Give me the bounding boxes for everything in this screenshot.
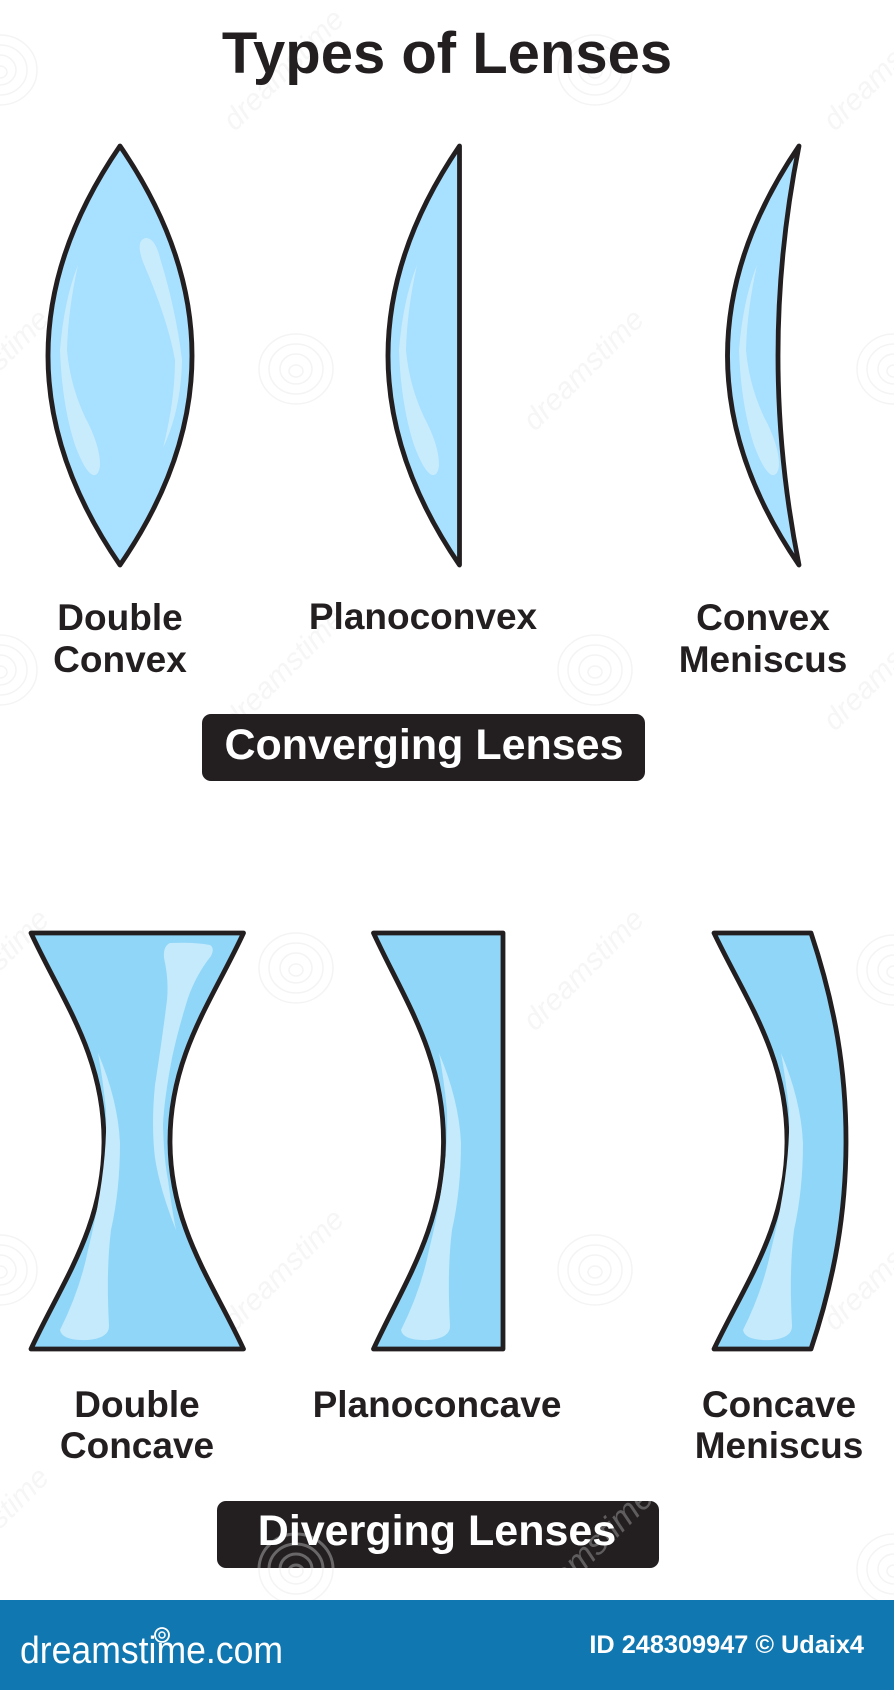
- badge: diverging lenses: dreamstime: [509, 1478, 661, 1631]
- badge: converging lenses: Converging Lenses: [224, 721, 624, 769]
- badge: diverging lenses: [217, 1501, 659, 1568]
- label: double concave: Double: [74, 1384, 200, 1425]
- lens: convex meniscus: [728, 146, 799, 565]
- title: Types of Lenses: [222, 21, 672, 86]
- watermark pattern: dreamstime: [217, 3, 351, 137]
- lens: double convex: [48, 146, 192, 565]
- label: double concave: Concave: [60, 1425, 214, 1466]
- lens: planoconcave: [374, 933, 503, 1349]
- label: concave meniscus: Meniscus: [695, 1425, 863, 1466]
- footer credit: ID 248309947 © Udaix4: [589, 1631, 864, 1659]
- label: planoconcave: Planoconcave: [313, 1384, 561, 1425]
- watermark pattern: dreamstime: [517, 303, 651, 437]
- watermark pattern: dreamstime: [217, 1203, 351, 1337]
- label: convex meniscus: Meniscus: [679, 639, 847, 680]
- badge: converging lenses: [202, 714, 645, 781]
- lens: double concave: [31, 933, 244, 1349]
- footer bar: [0, 1600, 894, 1690]
- label: double convex: Convex: [53, 639, 187, 680]
- lens: planoconvex: [388, 146, 460, 565]
- label: double convex: Double: [57, 597, 183, 638]
- watermark pattern: dreamstime: [517, 903, 651, 1037]
- badge: diverging lenses: Diverging Lenses: [258, 1507, 616, 1555]
- label: concave meniscus: Concave: [702, 1384, 856, 1425]
- label: planoconvex: Planoconvex: [309, 596, 538, 637]
- label: convex meniscus: Convex: [696, 597, 830, 638]
- footer logo: dreamstime.com: dreamstime.com: [20, 1630, 283, 1672]
- watermark pattern: dreamstime: [217, 603, 351, 737]
- lens: concave meniscus: [714, 933, 846, 1349]
